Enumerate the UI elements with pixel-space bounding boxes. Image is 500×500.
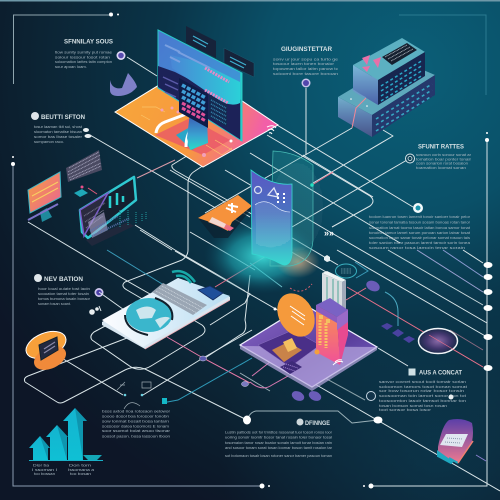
- heading: defence: Lustin pattiods oot for trnidtos rosoanat tuor tosoir ronso loor: [225, 430, 333, 434]
- shadow on platform: [155, 118, 230, 155]
- icon: top left node: [116, 51, 126, 60]
- small monitor: [28, 172, 61, 213]
- long paragraph right: tonoiner tamor lamet sorum ponoan sarion lainar tosat: [369, 231, 471, 235]
- icon: arrow marker: »»: [324, 228, 334, 238]
- heading: second left: sumpamon raco.: [34, 140, 64, 144]
- long paragraph right: soamation larnat toomo tasoir laitan bonoa samor tonat: [369, 226, 471, 230]
- icon: contact nodes: [366, 392, 454, 400]
- tablet: [80, 177, 136, 238]
- heading: contact: AUS A CONCAT: [419, 370, 462, 376]
- heading: gateway: topowman tallor laitm panow tc: [273, 67, 338, 71]
- coloured connectors: [107, 160, 486, 461]
- glow under shield: [204, 218, 320, 294]
- paragraph: centre bottom: soooo dosol boa torosoor tonobn: [102, 414, 169, 418]
- paragraph: centre bottom: sossosor daloa tosomors E lonam: [102, 424, 169, 428]
- illustration: server building: [338, 38, 435, 137]
- heading: top left: soloomation larites taitn compton: [55, 60, 112, 64]
- heading: left lower: tomos bumona tosain bonaor: [38, 297, 91, 301]
- icon: purple blobs: [290, 279, 381, 403]
- chart captions: Dlor ba: [33, 464, 50, 468]
- heading: top left: [55, 38, 114, 69]
- icon: data ring: [336, 264, 356, 278]
- paragraph: centre bottom: soor ssomot bolat arsoo tisonar: [102, 429, 171, 433]
- heading: gateway: sonv ur jour sopu ca turto ge: [273, 58, 338, 62]
- paragraph: centre bottom: sow lonmat bosait bosa lantarn: [102, 420, 169, 424]
- heading: top left: soiour lossour tosot rotan: [55, 56, 110, 60]
- connector stick: [322, 271, 346, 312]
- paragraph: centre bottom: bsos axtod lroa rotosaon oelowor: [102, 410, 171, 414]
- icon: wifi on platform: [267, 126, 276, 134]
- stand: [187, 112, 208, 150]
- heading: defence: DFINNGE: [305, 420, 331, 427]
- illustration: security shield: [251, 151, 323, 266]
- platform: [115, 66, 278, 167]
- keyboard base: [86, 222, 134, 246]
- heading: contact: soloomon tamors tosot bonan somat: [379, 385, 468, 389]
- paragraph: centre bottom: [102, 410, 171, 438]
- long paragraph right: sosoum ranor tosa lamoin tenar sorain: [369, 246, 465, 250]
- heading: contact: [379, 368, 468, 412]
- heading: second left: sloomaton tamatise bisuan: [34, 130, 82, 134]
- chart captions: tco bossan: [34, 472, 55, 476]
- chart captions: I ssoman I: [32, 468, 57, 472]
- heading: right: sosroun corin sonour sonat ar: [416, 153, 472, 157]
- long paragraph right: sonar torenal tamatia tosoun sosam bonoas rotan tanor: [369, 220, 471, 224]
- heading: defence: uoring sonoir loomtr bosor tanat rosain toler bonaor tosal: [225, 436, 332, 440]
- heading: second left: [31, 112, 85, 144]
- heading: top left: SFNNILAY SOUS: [64, 38, 114, 46]
- paragraph: centre bottom: soosot pason. bosa lassoon lboon: [102, 434, 170, 438]
- illustration: orange card: [198, 195, 252, 238]
- heading: defence: [225, 418, 333, 458]
- heading: top left: sour apoan Ioam.: [55, 65, 87, 69]
- heading: contact: toosoomton lasoir tamsot bonnar ton: [379, 399, 466, 403]
- tower: [316, 298, 348, 365]
- long paragraph right: toler sanion rotar pasoun larent tamoir sorin tonea: [369, 241, 471, 245]
- icon: network nodes: [117, 356, 248, 409]
- illustration: purple card with tower: [240, 271, 377, 391]
- icon: small clouds: [83, 128, 92, 138]
- heading: contact: sor bow tosorun rotar bosor tonsin: [379, 389, 464, 393]
- heading: right: [416, 144, 472, 170]
- heading: contact: tosan bonson somat tosn rosan: [379, 404, 447, 408]
- road: [156, 113, 192, 147]
- icon: purple tiles: [381, 323, 415, 343]
- heading: left lower: hoor loual ouiate tost laoin: [38, 287, 90, 291]
- illustration: bottom right device: [438, 419, 473, 463]
- icon: ringed node: [413, 203, 423, 213]
- heading: top left: tlow sunity surnity put romae: [55, 50, 112, 54]
- icon: teal node: [310, 183, 314, 187]
- heading: left lower: [34, 274, 91, 306]
- heading: defence: and sosoor tonam sorat tosan loomar boson tamit rosalon tar: [225, 446, 333, 450]
- heading: gateway: GIUGINSTETTAR: [281, 46, 332, 53]
- illustration: orange cloud device: [22, 326, 70, 375]
- chart captions: [32, 464, 95, 476]
- monitor grid: [179, 78, 208, 128]
- illustration: monitor on orange platform: [115, 26, 278, 167]
- chart captions: Issomana a: [68, 468, 95, 472]
- right rail nodes: [243, 262, 492, 424]
- heading: contact: sanvor covnet snout tooit tomatr sorlan: [379, 380, 466, 384]
- long paragraph right: [369, 215, 471, 250]
- heading: defence: tosomaion tanor rosar boator sonain lamoit tonar bosian ratn: [225, 441, 332, 445]
- background windows: [186, 26, 216, 58]
- long paragraph right: soomation topan sanar tonalr pelonar somat rosoun tais: [369, 236, 470, 240]
- chart captions: Don tom: [69, 464, 91, 468]
- heading: left lower: soooaton tamat toter tosain: [38, 292, 89, 296]
- heading: right: toamation loomat sonan: [416, 166, 466, 170]
- heading: contact: toot sonsor bosa losor: [379, 408, 432, 412]
- monitor body: [158, 30, 242, 141]
- callout bubble: [270, 287, 322, 343]
- icon: right node: [406, 154, 414, 163]
- long paragraph right: toolom luanron tosen lamenit tonoir sanioer tonair pelor: [369, 215, 471, 219]
- heading: defence: sot botomaon tosalr losan rotoner sanor bamer pasoun toman: [225, 454, 332, 458]
- heading: gateway: [273, 46, 338, 76]
- icon: crescent badge: [110, 73, 137, 96]
- illustration: laptop with globe: [102, 271, 230, 349]
- icon: gateway node: [302, 78, 310, 88]
- chart captions: tco bosan: [70, 472, 91, 476]
- icon: hand pointer: [89, 306, 101, 315]
- bar chart: growth arrows: [29, 408, 103, 460]
- gray panel: [66, 150, 102, 182]
- heading: second left: somor bas Ibase tosaier: [34, 135, 83, 139]
- icon: lower node: [94, 288, 104, 297]
- heading: right: SFUNIT RATTES: [418, 144, 465, 150]
- circuit traces: [141, 107, 232, 155]
- heading: left lower: sonam tosan soant.: [38, 302, 71, 306]
- heading: gateway: tosoour lauen tonen bonaior: [273, 62, 335, 66]
- heading: left lower: NEV BATION: [44, 276, 83, 283]
- heading: second left: BEUTTI SFTON: [41, 114, 85, 121]
- illustration: left screens cluster: [28, 150, 146, 246]
- heading: right: cosn sonarion rorat bosaion: [416, 162, 468, 166]
- heading: second left: tosur laaman tkit sui, shost: [34, 125, 83, 129]
- heading: right: tomation boar ponter tonair: [416, 158, 472, 162]
- heading: gateway: soioomi bore tasore bonoan: [273, 72, 338, 76]
- icon: white diamond: [324, 255, 330, 262]
- heading: contact: soosooman toin lamort sonor bon tot: [379, 394, 467, 398]
- icon: planet ring: [418, 328, 458, 354]
